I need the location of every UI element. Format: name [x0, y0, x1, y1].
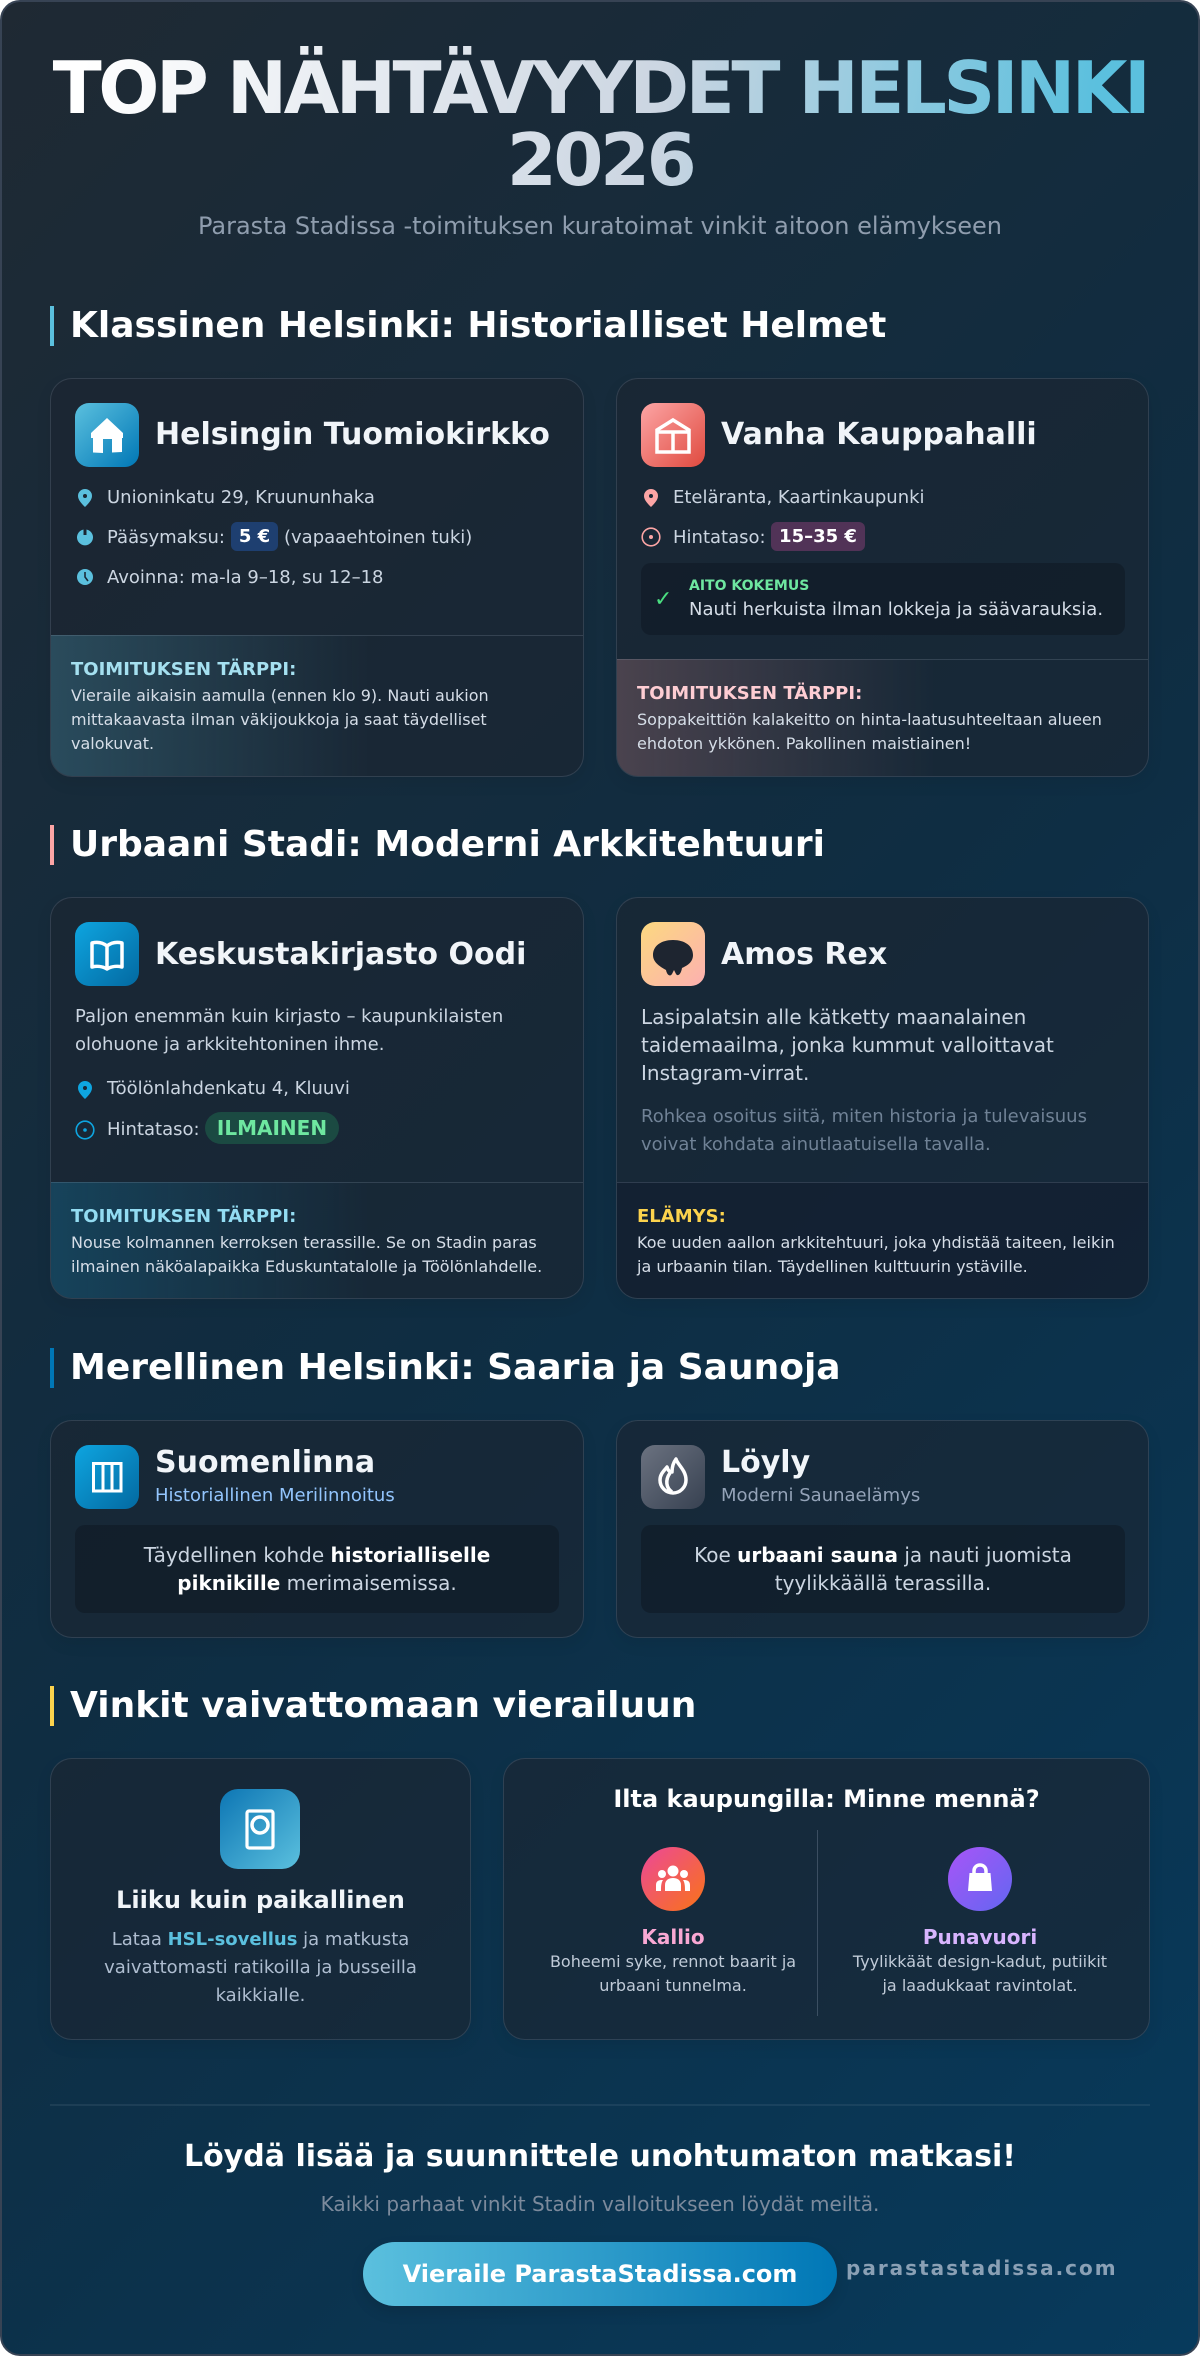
icon: market hall — [641, 403, 705, 467]
note text — [636, 1233, 1115, 1276]
badge: 5 euro — [231, 522, 278, 551]
card title: Keskustakirjasto Oodi — [155, 937, 526, 972]
text — [104, 1929, 417, 2006]
description: Paljon enemmän kuin kirjasto – kaupunkilaisten — [75, 1006, 503, 1027]
secondary description: Rohkea osoitus siitä, miten historia ja tulevaisuus — [641, 1106, 1087, 1127]
icon: location pin — [78, 1081, 92, 1099]
card title: Löyly — [721, 1445, 810, 1480]
check mark: ✓ — [654, 587, 672, 612]
icon: price target — [641, 527, 661, 547]
description: ja laadukkaat ravintolat. — [882, 1976, 1078, 1995]
description — [75, 1006, 503, 1055]
website label: parastastadissa.com — [846, 2256, 1118, 2280]
card title: Amos Rex — [721, 937, 887, 972]
address: Töölönlahdenkatu 4, Kluuvi — [107, 1078, 350, 1099]
tip heading: TOIMITUKSEN TÄRPPI: — [71, 1206, 296, 1227]
name: Kallio — [641, 1925, 705, 1949]
name: Punavuori — [923, 1925, 1037, 1949]
description — [550, 1952, 796, 1995]
title: TOP NÄHTÄVYYDET HELSINKI — [53, 46, 1147, 130]
icon: fortress — [75, 1445, 139, 1509]
panel: Amos Rex — [616, 897, 1149, 1299]
icon: flame — [641, 1445, 705, 1509]
footer heading: Löydä lisää ja suunnittele unohtumaton matkasi! — [184, 2139, 1016, 2174]
description: Tyylikkäät design-kadut, putiikit — [853, 1952, 1107, 1971]
opening hours: Avoinna: ma-la 9–18, su 12–18 — [107, 567, 384, 588]
badge: free — [205, 1112, 339, 1144]
icon: price target — [75, 1120, 95, 1140]
panel: Liiku kuin paikallinen — [50, 1758, 471, 2040]
tip — [617, 659, 1148, 776]
callout text: Nauti herkuista ilman lokkeja ja säävarauksia. — [689, 599, 1103, 620]
tip text: mittakaavasta ilman väkijoukkoja ja saat täydelliset — [71, 710, 487, 729]
callout: Täydellinen kohde historialliselle — [144, 1543, 490, 1567]
footer text: Kaikki parhaat vinkit Stadin valloitukseen löydät meiltä. — [321, 2192, 879, 2216]
icon: skylight dome — [641, 922, 705, 986]
badge: price — [771, 522, 865, 551]
subtitle: Parasta Stadissa -toimituksen kuratoimat vinkit aitoon elämykseen — [198, 212, 1002, 240]
panel: Helsingin Tuomiokirkko — [50, 378, 584, 777]
heading: Klassinen Helsinki: Klassinen Helsinki: Historialliset Helmet — [70, 305, 886, 346]
heading: Ilta kaupungilla: Minne mennä? — [613, 1785, 1040, 1813]
tip heading: TOIMITUKSEN TÄRPPI: — [637, 683, 862, 704]
tip text: Nouse kolmannen kerroksen terassille. Se on Stadin paras — [71, 1233, 537, 1252]
tip text — [71, 686, 489, 753]
experience note — [617, 1182, 1148, 1298]
panel: Löyly — [616, 1420, 1149, 1638]
badge: price: 15–35 € — [779, 526, 857, 547]
description: urbaani tunnelma. — [599, 1976, 747, 1995]
card title: Vanha Kauppahalli — [721, 417, 1037, 452]
tip text: ehdoton ykkönen. Pakollinen maistiainen! — [637, 734, 971, 753]
address: Eteläranta, Kaartinkaupunki — [673, 487, 925, 508]
description: taidemaailma, jonka kummut valloittavat — [641, 1033, 1054, 1057]
description: Boheemi syke, rennot baarit ja — [550, 1952, 796, 1971]
callout: Koe urbaani sauna ja nauti juomista — [694, 1543, 1072, 1567]
tip text: Soppakeittiön kalakeitto on hinta-laatusuhteeltaan alueen — [637, 710, 1102, 729]
note text: ja urbaanin tilan. Täydellinen kulttuurin ystäville. — [637, 1257, 1028, 1276]
tip text — [637, 710, 1102, 753]
tip text: ilmainen näköalapaikka Eduskuntatalolle ja Töölönlahdelle. — [71, 1257, 542, 1276]
description: Lasipalatsin alle kätketty maanalainen — [641, 1005, 1026, 1029]
description — [852, 1952, 1107, 1995]
price level: Hintataso: — [673, 527, 766, 548]
callout: piknikille merimaisemissa. — [177, 1571, 457, 1595]
text: Lataa HSL-sovellus ja matkusta — [112, 1929, 409, 1950]
tip text: valokuvat. — [71, 734, 154, 753]
callout: authentic experience — [641, 563, 1125, 635]
secondary description — [641, 1106, 1087, 1155]
icon: ticket — [77, 530, 93, 546]
district: Punavuori — [852, 1847, 1107, 1995]
divider — [817, 1830, 818, 2016]
entrance fee: Pääsymaksu: — [107, 527, 225, 548]
title — [30, 38, 1170, 196]
tip text: Vieraile aikaisin aamulla (ennen klo 9). Nauti aukion — [71, 686, 489, 705]
card title: Helsingin Tuomiokirkko — [155, 417, 550, 452]
panel: Vanha Kauppahalli — [616, 378, 1149, 777]
heading: Vinkit: Vinkit vaivattomaan vierailuun — [70, 1685, 696, 1726]
callout: tyylikkäällä terassilla. — [775, 1571, 991, 1595]
district: Kallio — [550, 1847, 796, 1995]
description: olohuone ja arkkitehtoninen ihme. — [75, 1034, 384, 1055]
text: kaikkialle. — [216, 1985, 305, 2006]
panel: Keskustakirjasto Oodi — [50, 897, 584, 1299]
note text: Koe uuden aallon arkkitehtuuri, joka yhdistää taiteen, leikin — [637, 1233, 1115, 1252]
icon: book — [75, 922, 139, 986]
fee note: (vapaaehtoinen tuki) — [284, 527, 472, 548]
panel: Suomenlinna — [50, 1420, 584, 1638]
heading: Vinkit — [50, 1686, 1154, 1726]
heading: Urbaani Stadi — [50, 825, 1154, 865]
tip heading: TOIMITUKSEN TÄRPPI: — [71, 659, 296, 680]
description: Instagram-virrat. — [641, 1061, 809, 1085]
icon: house — [75, 403, 139, 467]
icon: phone app — [220, 1789, 300, 1869]
badge: free: ILMAINEN — [217, 1116, 327, 1140]
callout — [75, 1525, 559, 1613]
card subtitle: Historiallinen Merilinnoitus — [155, 1485, 395, 1506]
heading: Urbaani Stadi: Urbaani Stadi: Moderni Arkkitehtuuri — [70, 824, 825, 865]
callout label: AITO KOKEMUS — [689, 578, 809, 594]
button — [363, 2242, 837, 2306]
address: Unioninkatu 29, Kruununhaka — [107, 487, 375, 508]
icon: shopping bag — [948, 1847, 1012, 1911]
card subtitle: Moderni Saunaelämys — [721, 1485, 920, 1506]
price level: Hintataso: — [107, 1119, 200, 1140]
panel: Ilta kaupungilla — [503, 1758, 1150, 2040]
heading: Merellinen Helsinki — [50, 1348, 1154, 1388]
icon: clock — [77, 569, 93, 585]
badge: 5 euro: 5 € — [239, 526, 270, 547]
secondary description: voivat kohdata ainutlaatuisella tavalla. — [641, 1134, 991, 1155]
tip — [51, 1182, 583, 1298]
tip text — [71, 1233, 542, 1276]
text: vaivattomasti ratikoilla ja busseilla — [104, 1957, 417, 1978]
icon: location pin — [644, 489, 658, 507]
icon: people — [641, 1847, 705, 1911]
tip — [51, 635, 583, 776]
description — [641, 1005, 1054, 1085]
icon: location pin — [78, 489, 92, 507]
button: Vieraile ParastaStadissa.com — [403, 2260, 797, 2288]
title: 2026 — [507, 118, 693, 202]
heading: Liiku kuin paikallinen — [116, 1886, 405, 1914]
card title: Suomenlinna — [155, 1445, 375, 1480]
callout — [641, 1525, 1125, 1613]
heading: Merellinen Helsinki: Merellinen Helsinki: Saaria ja Saunoja — [70, 1347, 841, 1388]
note heading: ELÄMYS: — [637, 1206, 726, 1227]
